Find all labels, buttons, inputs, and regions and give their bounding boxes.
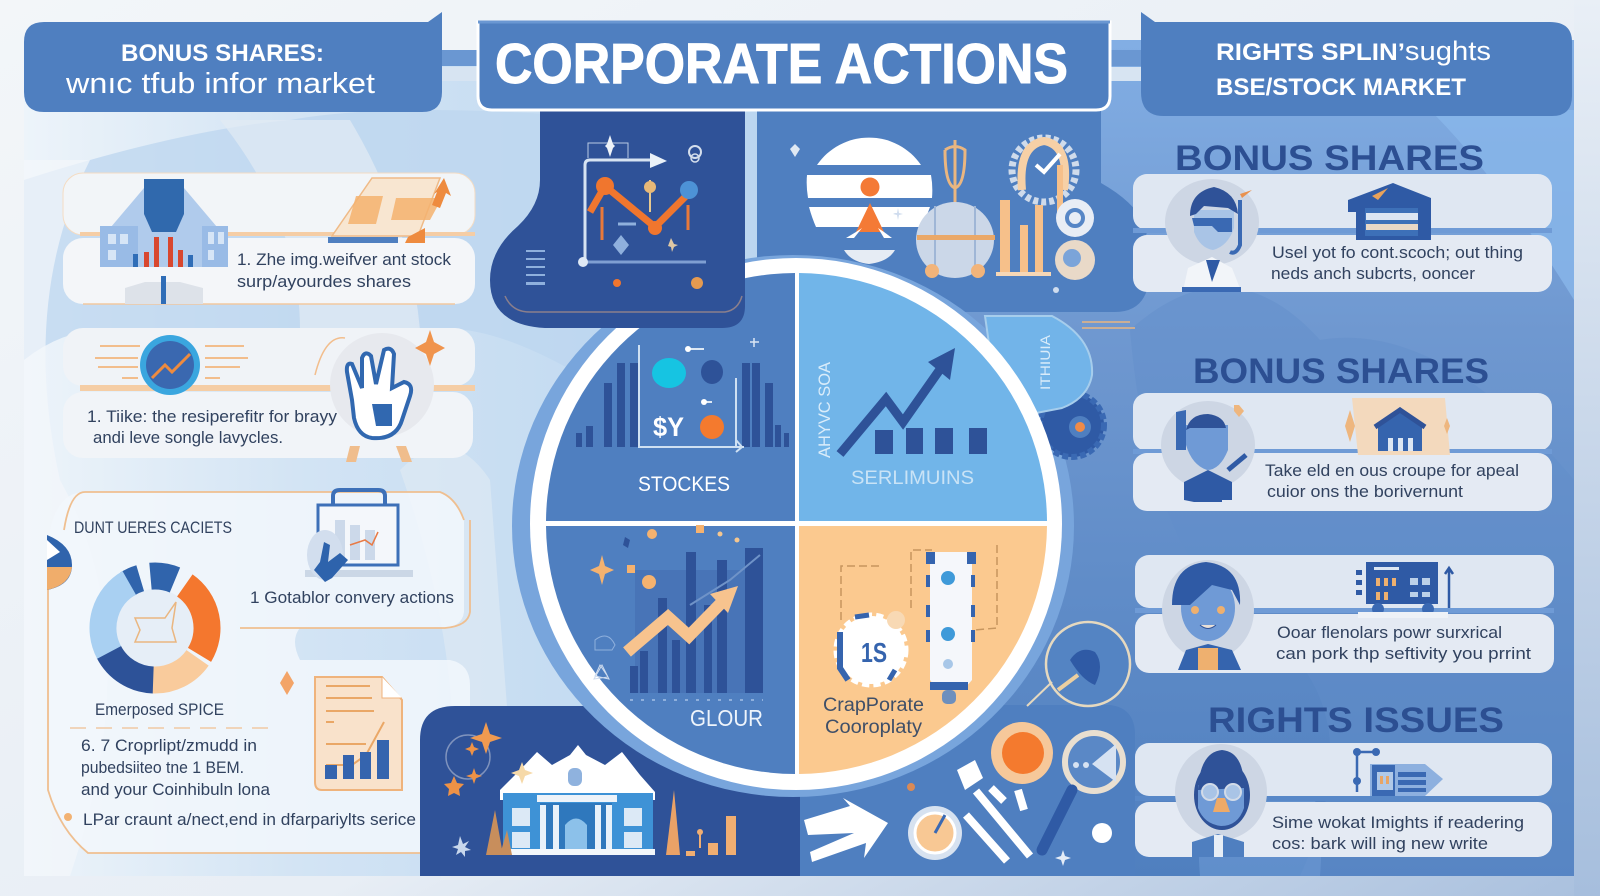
icon: towers and small bars [452,790,736,857]
decoration: magnifier outline above tools panel [1027,622,1130,706]
icon: document with chart [315,677,402,790]
donut caption: Emerposed SPICE [95,700,224,719]
icon: person with tools [1161,401,1255,502]
section: bonus shares right 1 [1133,139,1552,292]
icon: lantern globe [916,140,995,278]
icon: gear, check mark and bars [790,138,1095,293]
cards [1133,393,1552,511]
cards [1133,174,1552,292]
icon: dashboard cart [1356,562,1453,618]
icon: white sticks and shards [907,760,1112,866]
panel: card 3 donut and actions [47,490,470,853]
quadrant: stocks: $Y [653,412,684,442]
title banner [478,22,1110,110]
bars [576,363,789,447]
divider dashed [70,727,272,729]
panel: card 2 left [63,328,475,462]
icon: laptop with clipboard [305,490,413,582]
card 2 text: 1. Tiike: the resiperefitr for brayy [87,407,338,426]
icon: institution with bars [100,179,228,304]
icon: gear coin [837,611,905,684]
card 2 text: andi leve songle lavycles. [93,428,283,447]
text: cos: bark will ing new write [1272,834,1488,853]
icon: orbit stars [444,722,533,796]
card 3 paragraph [81,736,271,799]
card 3 paragraph: 6. 7 Croprlipt/zmudd in [81,736,257,755]
decoration: peach lines under top right panel [1082,322,1135,328]
quadrant: peach: CrapPorate [823,695,924,716]
text: Usel yot fo cont.scoch; out thing [1272,243,1523,262]
text: Take eld en ous croupe for apeal [1265,461,1519,480]
quadrant: peach [799,526,1047,774]
quadrant: light blue [799,273,1053,521]
icon: magnifying glass [1042,733,1123,850]
section: rights issues [1135,701,1552,857]
icon: chip column [926,552,976,704]
decoration: gear right of circle [1040,393,1104,457]
header: right [1141,12,1572,116]
heading: RIGHTS ISSUES [1208,701,1504,740]
text: Sime wokat Imights if readering [1272,813,1524,832]
chart ring: outer light band [512,255,1074,797]
chart: central quadrant circle [530,258,1062,790]
cards [1135,743,1552,857]
icon: hand in circle [315,330,445,462]
card 1 text [237,250,452,291]
card 3 paragraph: and your Coinhibuln lona [81,780,271,799]
card 2 text [87,407,338,447]
card 2 shapes [63,328,475,458]
decoration: side tab right of circle [985,316,1092,420]
quadrant: stocks [546,273,795,521]
card 3 paragraph: pubedsiiteo tne 1 BEM. [81,758,244,777]
heading: BONUS SHARES [1193,352,1489,391]
icon: person with headset [1165,179,1259,292]
background panel: left [24,60,800,880]
icon: round trend badge with lines [95,335,248,395]
text: neds anch subcrts, ooncer [1271,264,1475,283]
header: right: RIGHTS SPLIN’ sughts [1216,36,1491,66]
quadrant: light blue: SERLIMUINS [851,468,974,489]
icon: gear coin: 1S [861,637,887,668]
icon: striped globe with figure [807,138,932,264]
card 3 heading: DUNT UERES CACIETS [74,518,232,537]
quadrant: stocks: STOCKES [638,473,730,496]
panel: bottom left illustration with bank [420,706,800,876]
icon: bank building [490,745,655,855]
card 1 text: 1. Zhe img.weifver ant stock [237,250,452,269]
white ring [530,258,1062,790]
bullet point: LPar craunt a/nect,end in dfarpariylts serice [83,810,416,829]
icon: boy portrait [1162,560,1254,670]
heading: BONUS SHARES [1175,139,1484,178]
text [1272,813,1524,853]
section: dashboard right 3 [1135,555,1554,673]
quadrant: light blue: AHYVC SOA [815,361,834,458]
icon: document tag [1353,748,1443,796]
quadrant: bars with rising arrow [546,525,795,774]
chart: line with axes [578,135,706,289]
connector bars between headers and title [438,50,1150,81]
icon: partial pie at edge [47,535,72,590]
quadrant: bars with rising arrow: GLOUR [690,705,763,731]
icon: diamond [280,671,294,695]
title banner: CORPORATE ACTIONS [495,32,1068,96]
header: left: BONUS SHARES: [121,40,324,67]
text: Ooar flenolars powr surxrical [1277,623,1502,642]
text: can pork thp seftivity you prrint [1276,644,1531,663]
text [1265,461,1519,501]
section: bonus shares right 2 [1133,352,1552,511]
icon: list lines [526,250,545,285]
header: right: BSE/STOCK MARKET [1216,74,1466,101]
text [1276,623,1531,663]
icon: woman with glasses [1175,744,1267,857]
icon: house archive [1348,183,1431,240]
header: left [24,12,442,112]
quadrant: peach: Cooroplaty [825,717,923,738]
text: cuior ons the borivernunt [1267,482,1463,501]
card 1 shapes [63,173,475,304]
actions text: 1 Gotablor convery actions [250,588,454,607]
panel: bottom right illustration with tools [797,705,1135,876]
cards [1135,555,1554,673]
icon: white arrows [804,798,888,862]
panel: top left dark chart [490,106,745,328]
card 1 text: surp/ayourdes shares [237,272,411,291]
quadrant: light blue: ITHIUIA [1037,334,1053,390]
header: left: wnıc tfub infor market [65,68,375,100]
chart: donut [83,556,227,700]
panel: top right illustration [757,108,1147,312]
icon: orange target [991,722,1053,784]
background panel: right [800,40,1574,876]
text [1271,243,1523,283]
icon: open book with arrow [328,178,451,243]
icon: clock dial [908,806,962,860]
panel: card 1 bonus shares left [63,173,475,304]
card 3 outline [48,492,470,853]
icon: peach house card [1345,398,1450,455]
